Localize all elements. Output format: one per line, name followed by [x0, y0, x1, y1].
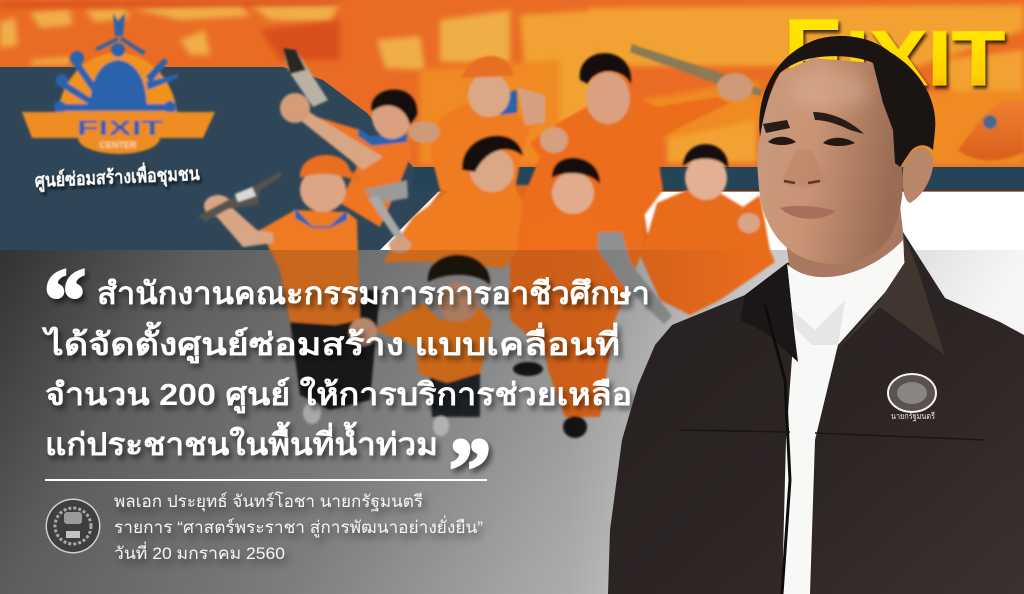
- jacket left collar: [740, 263, 798, 362]
- banner: [22, 112, 215, 138]
- eyes: [768, 137, 855, 146]
- tool: adjustable wrench: [598, 232, 672, 324]
- figure: central man: [383, 135, 523, 268]
- nostrils: [784, 181, 820, 183]
- panel: darkening veil: [0, 250, 1024, 594]
- headline word FIXIT on poster: [783, 0, 1005, 106]
- quote block: [41, 251, 650, 520]
- face: [757, 58, 903, 264]
- divider rule: [45, 479, 487, 481]
- icon: blue mechanic figure: [54, 13, 178, 113]
- figure: crouching man at front: [349, 255, 492, 436]
- jacket body: [608, 232, 1024, 594]
- hair: [759, 36, 935, 167]
- poster backdrop: orange map and slate band: [0, 0, 1024, 250]
- backing fill between figures: [395, 185, 650, 250]
- nose: [782, 150, 825, 187]
- figure: woman left with cap and drill: [204, 155, 380, 424]
- icon: closing quote mark: ”: [449, 421, 491, 520]
- figure: man centre right in jumpsuit: [507, 158, 613, 438]
- lower badge: [78, 138, 160, 154]
- speaker name: พลเอก ประยุทธ์ จันทร์โอชา นายกรัฐมนตรี: [114, 491, 423, 512]
- slate band: [0, 67, 1024, 250]
- quote line 1: สำนักงานคณะกรรมการการอาชีวศึกษา: [97, 276, 650, 311]
- logo: Fixit Center: [22, 13, 215, 154]
- letters IXIT: IXIT: [845, 14, 1005, 102]
- figure: man top right: [510, 53, 753, 417]
- panel: gradient base: [0, 250, 1024, 594]
- icon: opening quote mark: “: [44, 251, 86, 350]
- jacket right collar: [835, 232, 945, 355]
- logo word CENTER: CENTER: [99, 140, 137, 150]
- icon: orange cap: [958, 100, 1024, 160]
- figure: man upper left with raised drill: [280, 89, 417, 227]
- photo: team of technicians in orange uniforms: [198, 44, 775, 438]
- logo word FIXIT: FIXIT: [77, 117, 163, 140]
- white shirt: [782, 240, 905, 594]
- neck: [785, 205, 905, 300]
- jacket zip line: [765, 305, 790, 594]
- figure: woman right: [633, 144, 775, 315]
- logo Thai tagline: ศูนย์ซ่อมสร้างเพื่อชุมชน: [34, 160, 200, 193]
- photo: prime minister portrait: [608, 36, 1024, 594]
- date: วันที่ 20 มกราคม 2560: [114, 541, 285, 563]
- jacket emblem: [888, 374, 936, 422]
- mouth: [780, 206, 836, 219]
- jacket pocket seam: [680, 430, 985, 440]
- shirt collar shading: [792, 300, 845, 345]
- quote line 2: ได้จัดตั้งศูนย์ซ่อมสร้าง แบบเคลื่อนที่: [41, 321, 620, 364]
- quote line 3: จำนวน 200 ศูนย์ ให้การบริการช่วยเหลือ: [45, 376, 632, 414]
- forehead highlight: [790, 70, 870, 110]
- tool: drill held left: [198, 172, 282, 222]
- tool: drill top left: [283, 48, 328, 107]
- icon: government seal: [46, 498, 100, 554]
- large F: F: [783, 0, 842, 106]
- icon: orange half sun: [58, 53, 177, 112]
- eyebrows: [763, 112, 864, 134]
- emblem caption: นายกรัฐมนตรี: [891, 411, 935, 422]
- attribution text: [114, 491, 483, 563]
- tool: wrench top right: [630, 44, 762, 96]
- tool: spanner centre: [363, 180, 411, 253]
- programme title: รายการ “ศาสตร์พระราชา สู่การพัฒนาอย่างยั่งยืน”: [114, 515, 483, 538]
- ear: [903, 148, 933, 203]
- quote line 4: แก่ประชาชนในพื้นที่น้ำท่วม: [45, 421, 438, 462]
- figure: man top centre with cap: [408, 56, 545, 200]
